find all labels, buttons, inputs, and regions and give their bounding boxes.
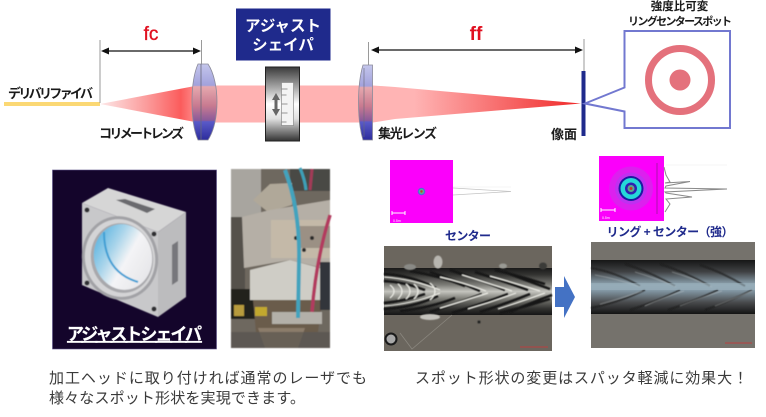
caption: left: 加工ヘッドに取り付ければ通常のレーザでも <box>49 370 367 387</box>
beam profile: ring plus center: 0.5m <box>602 216 610 220</box>
adjust shaper element <box>266 67 300 141</box>
callout: ring center spot <box>585 31 730 128</box>
adjust shaper title box <box>236 8 330 60</box>
photo: machining head <box>231 168 330 348</box>
beam profile: center: 0.5m <box>393 219 401 223</box>
heading: center: センター <box>445 229 491 243</box>
dimension fc <box>100 24 202 103</box>
product name: アジャストシェイパ <box>67 325 202 344</box>
dimension ff <box>368 24 584 71</box>
label: focusing lens: 集光レンズ <box>378 126 437 141</box>
adjust shaper title box: アジャスト <box>245 18 321 35</box>
beam profile: center <box>390 160 511 223</box>
arrow <box>555 276 575 318</box>
heading: ring plus center: リング + センター（強） <box>606 224 734 239</box>
caption: left <box>49 370 367 407</box>
dimension ff: ff <box>470 24 483 45</box>
label: collimator lens: コリメートレンズ <box>99 126 184 141</box>
caption: right: スポット形状の変更はスパッタ軽減に効果大！ <box>415 370 748 387</box>
collimator lens <box>192 64 217 140</box>
dimension fc: fc <box>144 24 158 45</box>
delivery fiber <box>4 102 100 106</box>
image plane <box>582 71 586 136</box>
adjust shaper title box: シェイパ <box>252 36 314 54</box>
focusing lens <box>358 65 372 140</box>
photo: weld bead center <box>384 246 552 351</box>
label: callout heading: 強度比可変 <box>651 0 709 13</box>
photo: weld bead ring plus center <box>591 242 755 348</box>
panel: adjust shaper product image <box>52 170 216 349</box>
label: delivery fiber: デリバリファイバ <box>8 86 93 101</box>
caption: left: 様々なスポット形状を実現できます。 <box>49 390 305 407</box>
label: callout heading <box>628 0 732 28</box>
beam profile: ring plus center <box>599 156 727 221</box>
label: callout heading: リングセンタースポット <box>628 14 732 28</box>
label: image plane: 像面 <box>551 127 577 142</box>
icon: shaper housing <box>74 188 186 317</box>
laser beam <box>100 86 581 122</box>
